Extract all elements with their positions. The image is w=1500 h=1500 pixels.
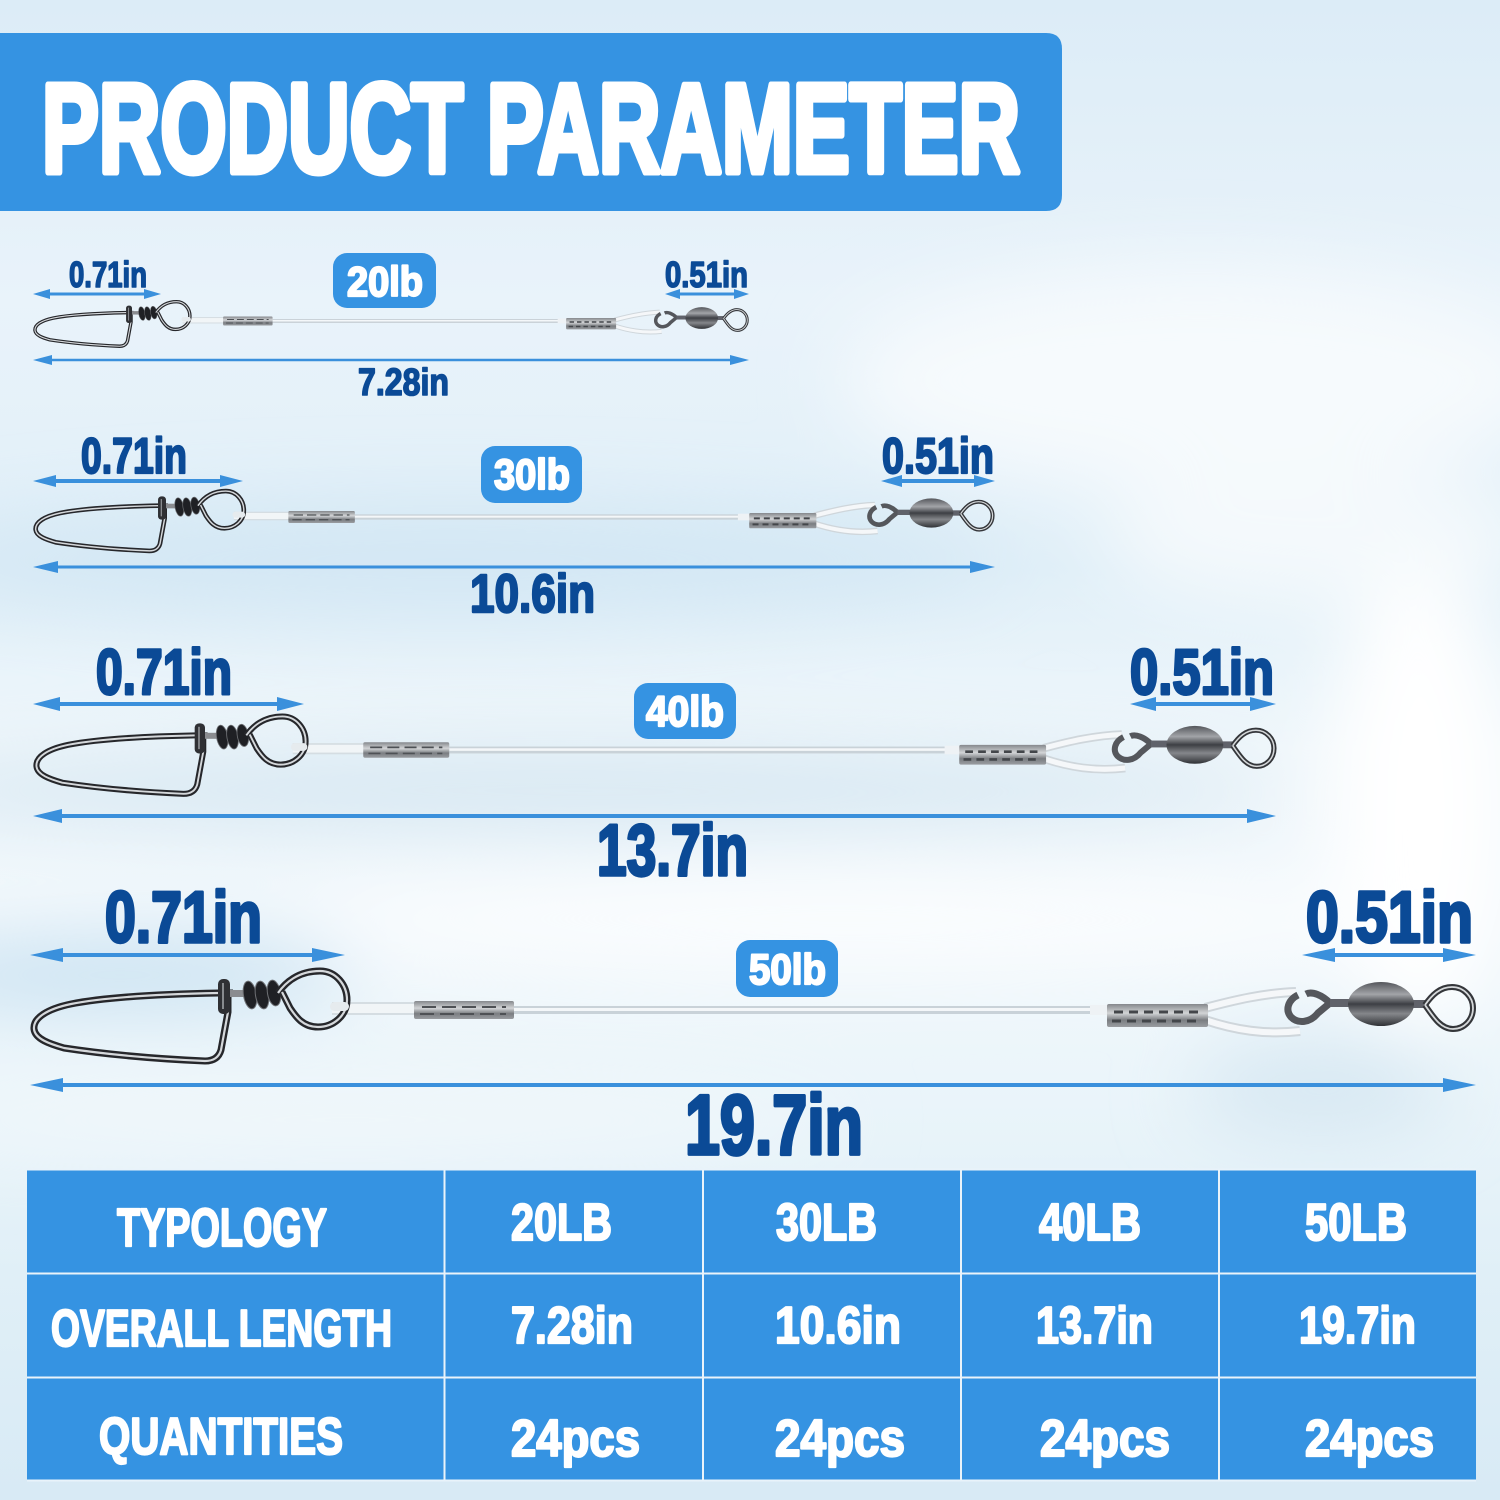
snap length arrow bbox=[33, 475, 243, 487]
row: typology: 50LB bbox=[1305, 1194, 1407, 1252]
swivel length arrow bbox=[665, 289, 749, 299]
overall length label: 10.6in bbox=[470, 564, 595, 624]
leader row: 30lb bbox=[33, 428, 995, 624]
30lb leader rig bbox=[36, 491, 993, 551]
swivel length label: 0.51in bbox=[882, 428, 994, 484]
20lb leader rig bbox=[35, 302, 747, 346]
leader row: 40lb bbox=[33, 636, 1276, 891]
row: typology: 30LB bbox=[776, 1194, 877, 1252]
row: quantities: 24pcs bbox=[1040, 1410, 1170, 1468]
weight badge 50lb: 50lb bbox=[749, 946, 826, 994]
row: typology bbox=[117, 1194, 1407, 1258]
overall length arrow bbox=[33, 355, 749, 365]
row: quantities: QUANTITIES bbox=[99, 1408, 343, 1466]
overall length arrow bbox=[30, 1078, 1476, 1092]
leader row: 50lb bbox=[30, 878, 1476, 1172]
row: quantities: 24pcs bbox=[1305, 1410, 1434, 1468]
row: quantities: 24pcs bbox=[511, 1410, 640, 1468]
leader row: 20lb bbox=[33, 253, 749, 404]
snap length label: 0.71in bbox=[81, 428, 187, 484]
row: quantities: 24pcs bbox=[775, 1410, 905, 1468]
swivel length arrow bbox=[881, 475, 995, 487]
overall length label: 19.7in bbox=[685, 1078, 863, 1172]
row: typology: TYPOLOGY bbox=[117, 1198, 327, 1258]
row: quantities bbox=[99, 1408, 1434, 1468]
snap length label: 0.71in bbox=[69, 254, 147, 295]
title banner bbox=[0, 33, 1062, 211]
overall length label: 7.28in bbox=[358, 362, 449, 404]
row: overall length: 13.7in bbox=[1036, 1297, 1153, 1355]
snap length arrow bbox=[30, 948, 345, 962]
row: overall length bbox=[51, 1297, 1416, 1358]
row: overall length: 10.6in bbox=[775, 1297, 901, 1355]
row: overall length: OVERALL LENGTH bbox=[51, 1300, 392, 1358]
swivel length arrow bbox=[1302, 948, 1476, 962]
title banner: PRODUCT PARAMETER bbox=[42, 58, 1020, 199]
50lb leader rig bbox=[34, 971, 1473, 1061]
swivel length arrow bbox=[1130, 697, 1276, 711]
swivel length label: 0.51in bbox=[665, 254, 748, 295]
overall length arrow bbox=[33, 561, 995, 573]
overall length label: 13.7in bbox=[597, 811, 748, 891]
snap length label: 0.71in bbox=[96, 636, 232, 708]
swivel length label: 0.51in bbox=[1130, 636, 1274, 708]
snap length label: 0.71in bbox=[105, 878, 262, 958]
weight badge 40lb: 40lb bbox=[646, 688, 724, 736]
snap length arrow bbox=[33, 289, 161, 299]
overall length arrow bbox=[33, 809, 1276, 823]
snap length arrow bbox=[33, 697, 304, 711]
row: typology: 40LB bbox=[1039, 1194, 1141, 1252]
weight badge 20lb bbox=[333, 253, 436, 308]
weight badge 30lb: 30lb bbox=[494, 451, 570, 499]
row: overall length: 7.28in bbox=[511, 1297, 633, 1355]
40lb leader rig bbox=[36, 716, 1274, 794]
weight badge 20lb: 20lb bbox=[347, 258, 423, 305]
row: overall length: 19.7in bbox=[1299, 1297, 1416, 1355]
specification table bbox=[27, 1170, 1476, 1480]
row: typology: 20LB bbox=[511, 1194, 612, 1252]
